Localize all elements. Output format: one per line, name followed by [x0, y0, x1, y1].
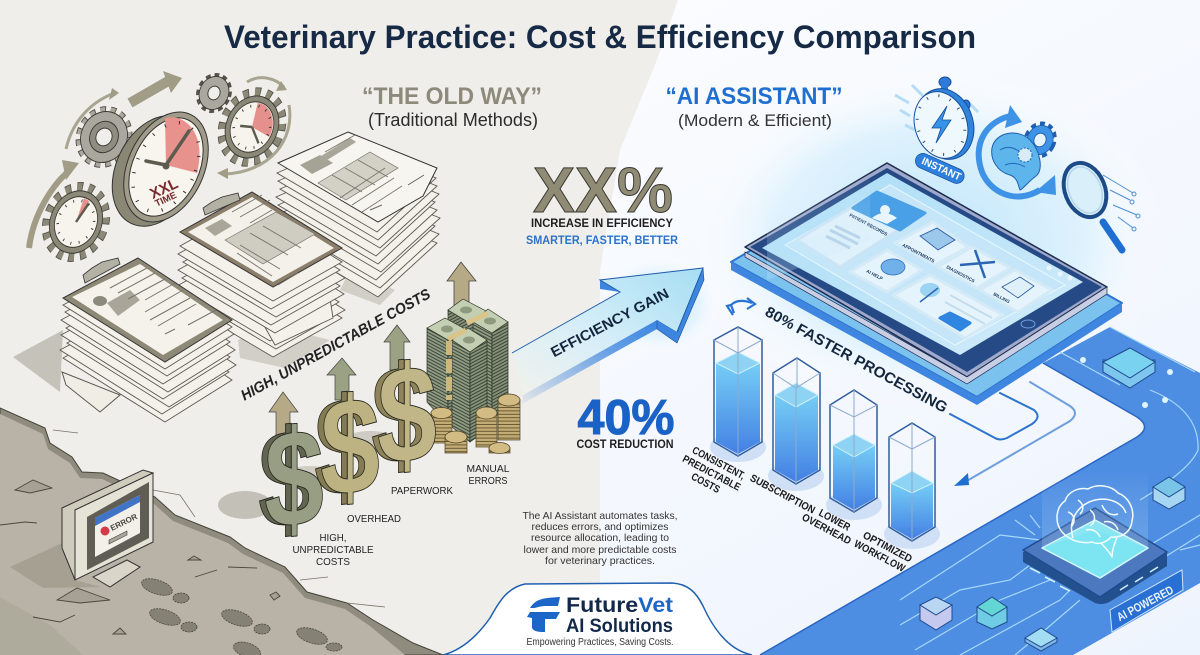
card: workflow: [893, 275, 1003, 338]
labels: cost factors: OVERHEAD: [347, 513, 401, 525]
text: explanation: The AI Assistant automates tasks,: [522, 511, 678, 522]
icon: rising dollar signs: $: [320, 368, 380, 527]
labels: ai benefits: COSTS: [689, 471, 722, 496]
heading: ai assistant: “AI ASSISTANT”: [666, 83, 842, 110]
tablet app panel: [785, 185, 1065, 345]
card: billing: [980, 270, 1052, 312]
logo: futurevet ai solutions: AI Solutions: [566, 615, 673, 637]
icon: gear top: [194, 71, 234, 115]
bar: optimized workflow: [884, 423, 940, 549]
labels: ai benefits: LOWER: [817, 507, 853, 534]
heading: the old way: (Traditional Methods): [368, 110, 538, 130]
icon: rising dollar signs: $: [264, 400, 324, 559]
icon: rising dollar signs: $: [258, 400, 318, 559]
arrow: efficiency gain: EFFICIENCY GAIN: [548, 286, 672, 361]
icon: ai chip with brain: [1023, 470, 1167, 604]
card: patient records: [797, 192, 925, 267]
logo: futurevet ai solutions: FutureVet: [566, 593, 673, 617]
labels: ai benefits: [680, 444, 914, 575]
card: billing: BILLING: [993, 291, 1011, 305]
labels: cost factors: UNPREDICTABLE: [292, 544, 374, 556]
icon: process arrows: [29, 71, 290, 248]
bar chart: glass columns: [710, 327, 940, 549]
heading: the old way: “THE OLD WAY”: [362, 83, 542, 110]
text: explanation: for veterinary practices.: [545, 556, 655, 567]
title: Veterinary Practice: Cost & Efficiency Comparison: [224, 19, 976, 55]
labels: cost factors: ERRORS: [468, 475, 508, 487]
paper stack: clipboard middle: [177, 192, 345, 368]
badge: ai powered: [1110, 570, 1183, 632]
card: ai brain: AI HELP: [866, 268, 884, 281]
stat: xx% increase in efficiency: SMARTER, FASTER, BETTER: [526, 235, 679, 247]
stat: xx% increase in efficiency: XX%: [533, 154, 673, 226]
background: tablet glow: [690, 70, 1170, 410]
labels: cost factors: MANUAL: [466, 463, 510, 475]
card: tools: DIAGNOSTICS: [946, 264, 975, 284]
labels: ai benefits: CONSISTENT,: [690, 444, 747, 482]
text: explanation: [522, 511, 678, 567]
tablet: [731, 163, 1122, 405]
labels: ai benefits: PREDICTABLE: [680, 453, 742, 494]
labels: ai benefits: OVERHEAD: [800, 511, 853, 547]
icon: f logo: [527, 597, 560, 632]
stat: 40% cost reduction: 40%: [578, 391, 674, 445]
label: high unpredictable costs (diagonal): HIGH, UNPREDICTABLE COSTS: [238, 286, 434, 404]
icon: rising dollar signs: $: [371, 336, 431, 495]
paper shadows: [13, 330, 63, 392]
icon: money stacks with coins: [427, 262, 520, 454]
labels: ai benefits: OPTIMIZED: [861, 529, 914, 566]
icon: footprints: [140, 575, 342, 655]
labels: ai benefits: SUBSCRIPTION: [748, 472, 817, 517]
text: explanation: lower and more predictable costs: [524, 545, 676, 556]
icon: large clock: [95, 98, 225, 240]
heading: ai assistant: (Modern & Efficient): [678, 111, 832, 130]
logo: futurevet ai solutions: Empowering Practices, Saving Costs.: [526, 637, 674, 648]
paper stack: clipboard front: [60, 258, 236, 422]
stat: 40% cost reduction: COST REDUCTION: [576, 439, 674, 451]
badge: instant: INSTANT: [920, 155, 963, 184]
icon: ai brain with gear and cycle arrows: [979, 105, 1058, 197]
text: explanation: resource allocation, leading to: [531, 533, 669, 544]
labels: ai benefits: WORKFLOW: [852, 538, 907, 575]
card: appointments: [895, 222, 968, 265]
circuit board platform: [760, 327, 1200, 655]
ground: cracked terrain: [0, 408, 443, 655]
label: 80% faster processing: 80% FASTER PROCESSING: [762, 304, 950, 417]
card: appointments: APPOINTMENTS: [902, 242, 935, 264]
stat: xx% increase in efficiency: INCREASE IN EFFICIENCY: [531, 216, 673, 230]
heading: ai assistant: [666, 83, 842, 130]
icon: error monitor: ERROR: [109, 512, 139, 533]
labels: cost factors: [292, 463, 510, 568]
background: beige panel: [0, 0, 678, 655]
icon: rising dollar signs: $: [377, 336, 437, 495]
icon: large clock: XXL: [147, 175, 181, 203]
tablet base platform: [731, 170, 1122, 397]
icon: clock with gear right: [211, 82, 293, 172]
icon: magnifying glass: [1056, 157, 1140, 250]
card: tools: [938, 247, 1010, 288]
labels: cost factors: HIGH,: [320, 532, 346, 544]
icon: rising dollar signs: $: [314, 368, 374, 527]
logo: futurevet ai solutions: [443, 583, 752, 655]
labels: cost factors: PAPERWORK: [391, 485, 453, 497]
labels: cost factors: COSTS: [316, 556, 350, 568]
bar: subscription: [768, 358, 824, 491]
arrows: workflow lines: [950, 382, 1075, 486]
icon: large clock: TIME: [153, 190, 179, 210]
bar: lower overhead: [826, 390, 882, 520]
heading: the old way: [362, 83, 542, 130]
tablet glow panels: [767, 160, 870, 280]
icon: gear top left: [71, 102, 137, 172]
paper stack: rear: [276, 132, 440, 305]
bar: consistent, predictable costs: [710, 327, 766, 462]
icon: circuit cube chips: [920, 348, 1185, 651]
icon: small clock with gear: [36, 178, 116, 266]
icon: error monitor: [62, 470, 153, 587]
arrow: efficiency gain: [512, 255, 720, 404]
icon: rising dollar signs: [218, 325, 437, 559]
card: ai brain: [850, 250, 922, 292]
icon: instant stopwatch: [895, 77, 983, 167]
badge: ai powered: AI POWERED: [1114, 583, 1176, 624]
card: patient records: PATIENT RECORDS: [849, 212, 888, 237]
text: explanation: reduces errors, and optimizes: [532, 522, 668, 533]
